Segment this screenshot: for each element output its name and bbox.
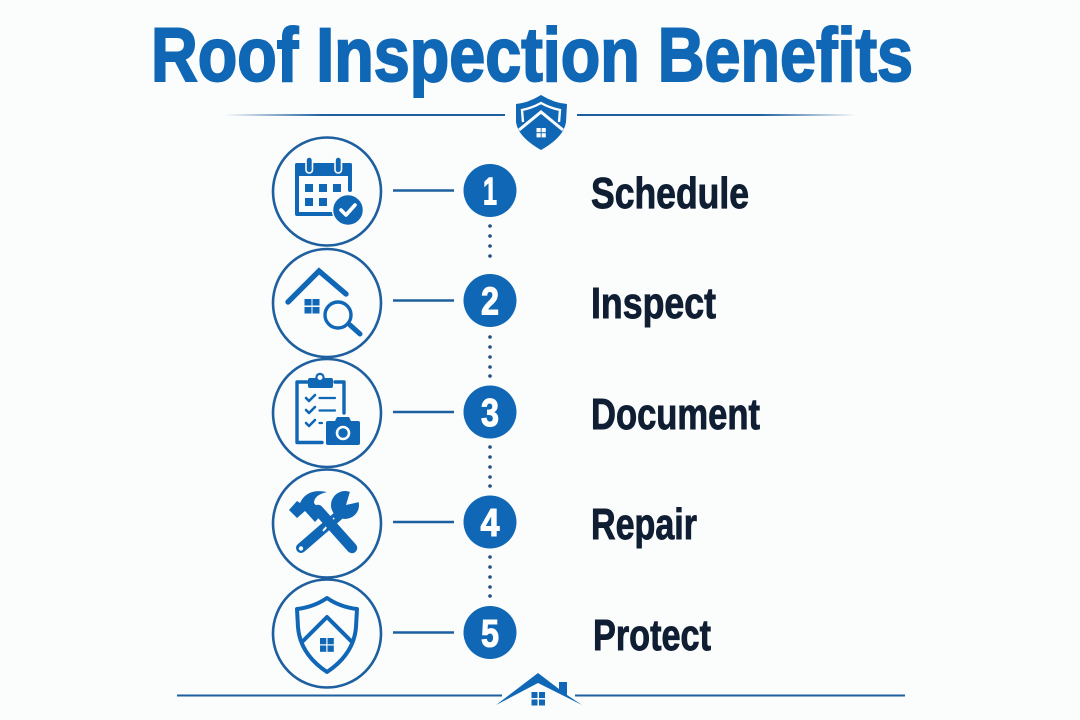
number badge 2: 2 — [481, 280, 499, 324]
number badge 3: 3 — [481, 392, 499, 435]
connector line — [393, 631, 454, 634]
number badge 4: 4 — [480, 502, 500, 545]
step 5: protect — [273, 580, 711, 688]
icon: hammer and wrench — [273, 470, 381, 578]
icon: shield with house — [516, 95, 567, 150]
dotted link 1-2 — [488, 224, 492, 258]
step 3: document — [273, 359, 760, 467]
title: Roof Inspection Benefits — [151, 13, 913, 98]
icon: house with magnifier — [273, 249, 381, 357]
label: Schedule: Schedule — [591, 169, 749, 218]
connector line — [393, 521, 454, 523]
icon: house roof — [496, 673, 582, 706]
dotted link 2-3 — [488, 335, 492, 378]
dotted link 3-4 — [488, 445, 492, 488]
header divider with shield emblem — [225, 95, 856, 150]
label: Protect: Protect — [593, 611, 711, 660]
connector line — [393, 189, 454, 192]
dotted link 4-5 — [488, 555, 492, 598]
number badge 1: 1 — [483, 170, 497, 214]
step 1: schedule — [273, 138, 749, 246]
number badge 1 — [464, 164, 516, 217]
connector line — [393, 411, 454, 413]
number badge 5: 5 — [481, 612, 499, 656]
icon: shield with house — [273, 580, 381, 688]
connector line — [393, 299, 454, 302]
label: Inspect: Inspect — [591, 279, 716, 328]
step 4: repair — [273, 470, 697, 578]
number badge 2 — [464, 274, 516, 327]
footer divider with house — [177, 673, 905, 706]
number badge 5 — [464, 606, 516, 659]
number badge 4 — [464, 496, 516, 548]
icon: calendar with check — [273, 138, 381, 246]
label: Repair: Repair — [591, 500, 697, 549]
icon: clipboard with camera — [273, 359, 381, 467]
number badge 3 — [464, 386, 516, 438]
label: Document: Document — [591, 390, 760, 439]
step 2: inspect — [273, 249, 716, 357]
